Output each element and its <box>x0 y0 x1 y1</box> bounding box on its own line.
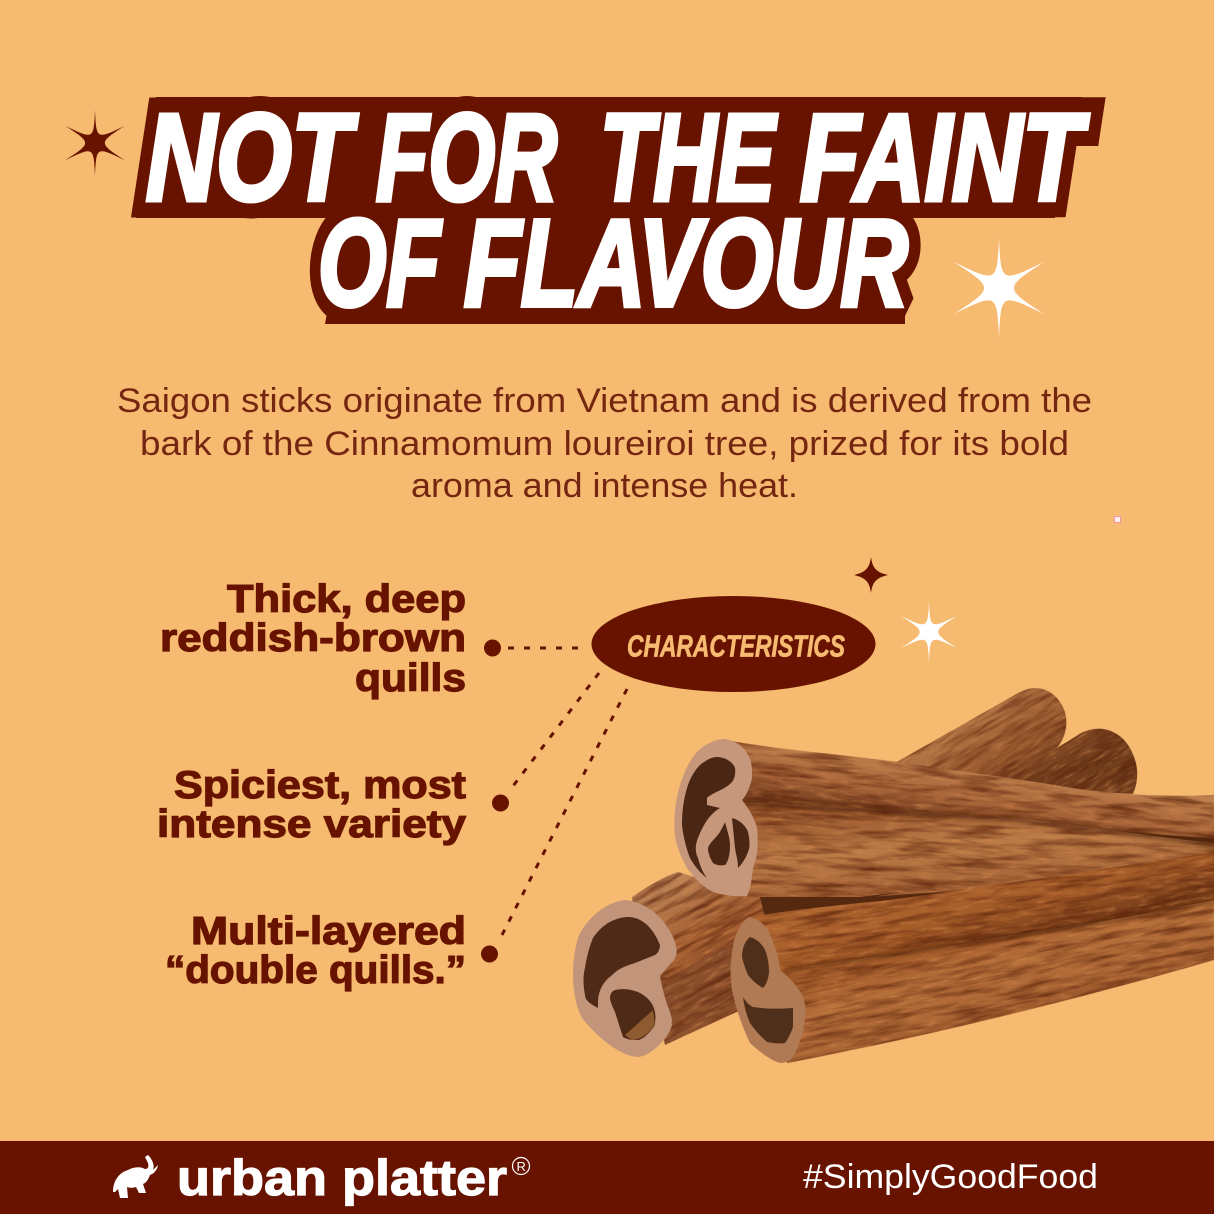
shadow under upper pair <box>760 892 900 918</box>
characteristic: double quills: Multi-layered <box>191 910 466 953</box>
characteristics badge <box>592 596 876 692</box>
badge label: CHARACTERISTICS <box>627 628 845 664</box>
registered mark <box>512 1158 530 1174</box>
icon: white sparkle by title <box>954 238 1044 338</box>
seam shadow between front sticks <box>783 901 1214 971</box>
title lettering: FOR <box>376 90 557 227</box>
icon: small white sparkle <box>901 601 957 663</box>
characteristic: double quills: “double quills.” <box>165 949 466 992</box>
title lettering <box>146 90 1089 332</box>
characteristic: double quills <box>165 910 466 992</box>
title lettering: FLAVOUR <box>464 196 908 332</box>
upper stick body <box>716 698 1214 880</box>
back stick one <box>856 614 1105 852</box>
registered mark: R <box>516 1159 526 1174</box>
characteristic: quills <box>160 578 466 700</box>
front pair end <box>730 917 806 1063</box>
hashtag: #SimplyGoodFood <box>803 1158 1098 1196</box>
intro paragraph <box>117 382 1092 505</box>
characteristic: quills: Thick, deep <box>227 578 466 621</box>
connectors <box>502 648 627 935</box>
icon: small dark sparkle <box>854 557 888 593</box>
bullet dots <box>481 640 509 962</box>
tiny pink marker <box>1114 516 1120 522</box>
title outline: FOR <box>376 90 557 227</box>
title outline: NOT <box>146 90 358 227</box>
title lettering: OF <box>318 196 442 332</box>
icon: elephant logo <box>113 1155 158 1198</box>
characteristic: quills: quills <box>355 657 466 700</box>
title outline: THE <box>600 90 778 227</box>
lower left stick lower tube <box>603 893 792 1084</box>
characteristic: spice: intense variety <box>157 803 466 846</box>
footer bar <box>0 1141 1214 1214</box>
intro paragraph: bark of the Cinnamomum loureiroi tree, prized for its bold <box>140 425 1069 463</box>
dark backing behind sticks <box>760 800 1214 975</box>
title outline: FLAVOUR <box>464 196 908 332</box>
back stick two <box>980 673 1166 850</box>
title outline <box>136 90 1089 332</box>
front stick body <box>744 818 1214 1145</box>
title lettering: THE <box>600 90 778 227</box>
title lettering: FAINT <box>800 90 1089 227</box>
characteristic: quills: reddish-brown <box>160 617 466 660</box>
badge oval <box>592 596 876 692</box>
title lettering: NOT <box>146 90 358 227</box>
icon: dark sparkle top left <box>65 110 125 176</box>
middle stick body <box>740 786 1214 914</box>
cinnamon sticks illustration <box>573 614 1214 1145</box>
title outline: OF <box>318 196 442 332</box>
lower left stick end <box>573 900 677 1057</box>
intro paragraph: aroma and intense heat. <box>411 467 798 505</box>
lower stick body <box>726 780 1214 1047</box>
title <box>136 90 1089 332</box>
title outline: FAINT <box>800 90 1089 227</box>
intro paragraph: Saigon sticks originate from Vietnam and is derived from the <box>117 382 1092 420</box>
characteristic: spice: Spiciest, most <box>174 764 466 807</box>
characteristic: spice <box>157 764 466 846</box>
upper pair end <box>674 739 758 896</box>
lower left stick upper tube <box>588 802 844 1048</box>
brand name: urban platter <box>177 1150 507 1206</box>
seam shadow between upper sticks <box>745 804 1214 846</box>
